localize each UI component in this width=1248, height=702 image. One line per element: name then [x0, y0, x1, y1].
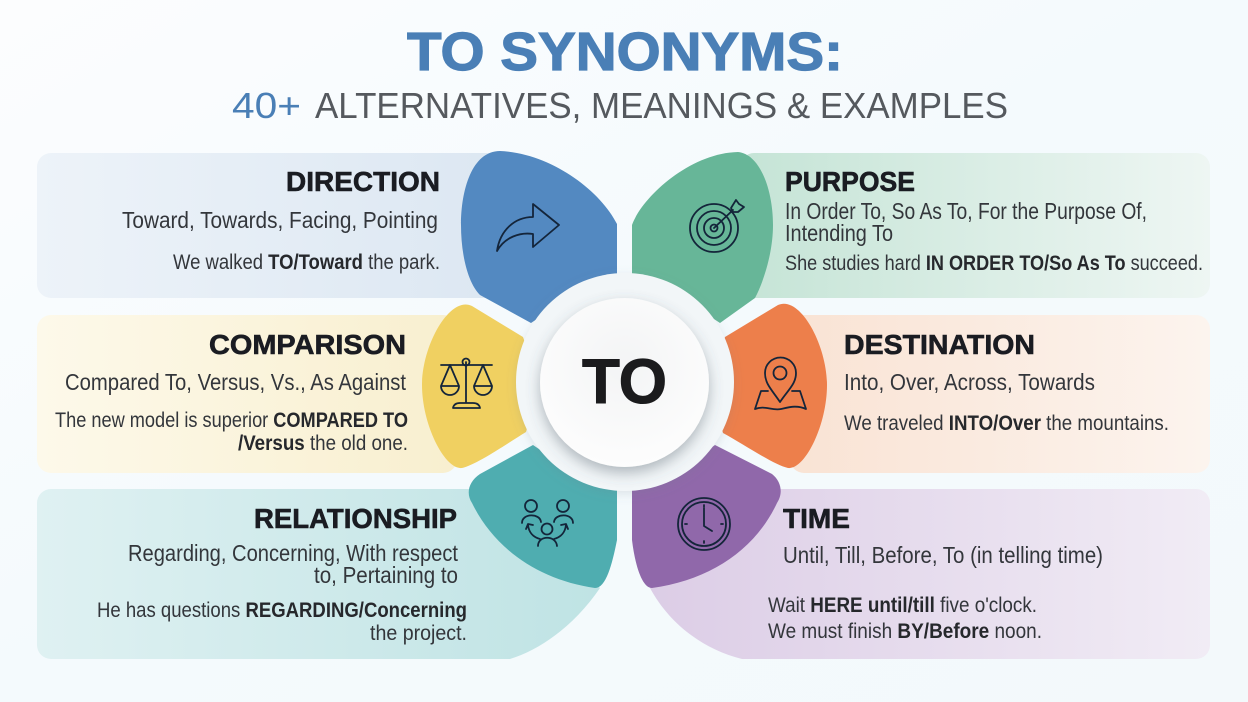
example: comparison — [55, 408, 408, 455]
heading: direction: DIRECTION — [286, 166, 440, 197]
icon: clock — [678, 498, 730, 550]
synonyms: purpose: Intending To — [785, 220, 893, 246]
example: purpose: She studies hard IN ORDER TO/So As To succeed. — [785, 251, 1203, 275]
heading: relationship: RELATIONSHIP — [254, 503, 457, 534]
synonyms: relationship — [128, 540, 459, 588]
panel: time — [650, 489, 1210, 659]
icon: map pin — [755, 358, 806, 409]
panel: destination — [790, 315, 1210, 473]
petal: time — [632, 445, 781, 588]
petal: destination — [710, 304, 827, 468]
icon: scales — [441, 358, 492, 408]
panel: direction — [37, 153, 507, 298]
heading: destination: DESTINATION — [844, 329, 1035, 360]
icon: target — [690, 200, 744, 252]
title: ALTERNATIVES, MEANINGS & EXAMPLES — [315, 85, 1008, 126]
synonyms: purpose: In Order To, So As To, For the Purpose Of, — [785, 198, 1147, 224]
example: direction: We walked TO/Toward the park. — [173, 250, 440, 274]
synonyms: relationship: Regarding, Concerning, With respect — [128, 540, 459, 566]
example: comparison: The new model is superior COMPARED TO — [55, 408, 408, 432]
title — [232, 22, 1008, 126]
heading: time: TIME — [783, 503, 850, 534]
heading: comparison: COMPARISON — [209, 329, 406, 360]
title: TO SYNONYMS: — [407, 22, 843, 82]
example: relationship: the project. — [370, 621, 467, 645]
example: time — [768, 593, 1042, 643]
panel: comparison — [37, 315, 457, 473]
synonyms: comparison: Compared To, Versus, Vs., As Against — [65, 369, 407, 395]
synonyms: destination: Into, Over, Across, Towards — [844, 369, 1095, 395]
example: relationship — [97, 598, 467, 645]
example: time: We must finish BY/Before noon. — [768, 619, 1042, 643]
icon: people — [522, 500, 573, 546]
title: 40+ — [232, 85, 301, 126]
petal: direction — [461, 151, 617, 323]
example: relationship: He has questions REGARDING/Concerning — [97, 598, 467, 622]
synonyms: relationship: to, Pertaining to — [314, 562, 458, 588]
petal: relationship — [469, 445, 617, 588]
example: time: Wait HERE until/till five o'clock. — [768, 593, 1037, 617]
center label: TO — [582, 347, 667, 417]
synonyms: purpose — [785, 198, 1147, 246]
synonyms: time: Until, Till, Before, To (in telling time) — [783, 542, 1103, 568]
petal: comparison — [422, 304, 540, 468]
example: comparison: /Versus the old one. — [238, 431, 408, 455]
petal: purpose — [632, 152, 773, 323]
panel: purpose — [740, 153, 1210, 298]
heading: purpose: PURPOSE — [785, 166, 915, 197]
center hub — [516, 273, 734, 491]
synonyms: direction: Toward, Towards, Facing, Pointing — [122, 207, 438, 233]
icon: arrow — [497, 204, 559, 251]
example: destination: We traveled INTO/Over the mountains. — [844, 411, 1169, 435]
panel: relationship — [37, 489, 600, 659]
